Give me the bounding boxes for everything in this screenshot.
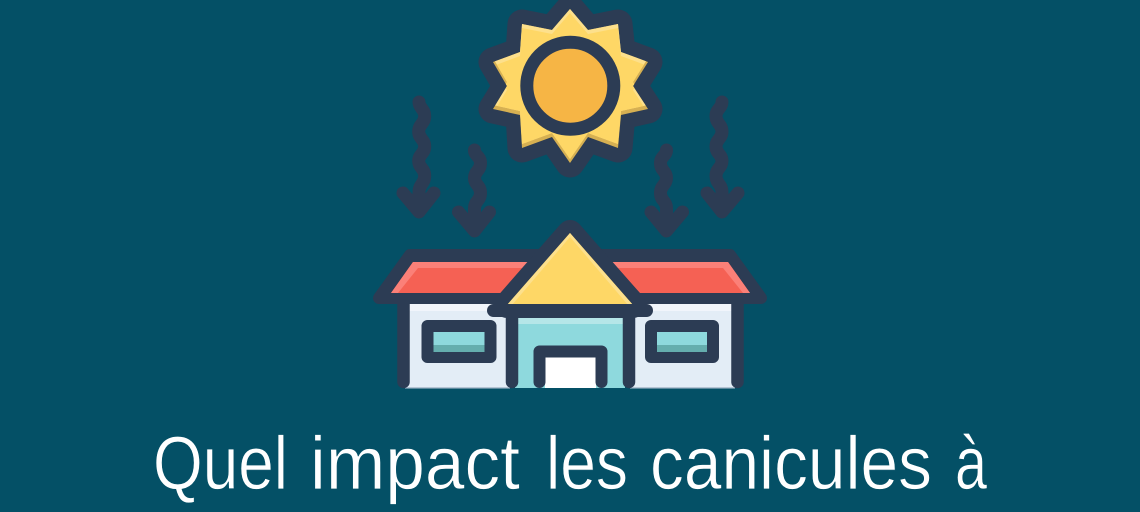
title: canicules <box>650 421 932 505</box>
door <box>540 352 602 388</box>
left wing wall <box>405 304 510 388</box>
arrow: inner right heat wave <box>651 150 682 231</box>
icon: sun <box>480 0 660 175</box>
left roof <box>379 255 540 298</box>
title <box>153 421 987 505</box>
structural posts and beam <box>404 300 738 382</box>
right window <box>651 326 713 357</box>
title: impact <box>310 421 520 505</box>
title: les <box>546 421 628 505</box>
central gable <box>507 233 633 305</box>
central porch <box>515 312 625 388</box>
right roof <box>600 255 761 298</box>
left window <box>428 326 490 357</box>
arrow: inner left heat wave <box>458 150 490 231</box>
arrow: far left heat wave <box>403 102 434 212</box>
arrow: far right heat wave <box>707 102 738 212</box>
title: à <box>955 421 987 505</box>
icon: house <box>379 233 761 388</box>
title: Quel <box>153 421 288 505</box>
right wing wall <box>630 304 735 388</box>
